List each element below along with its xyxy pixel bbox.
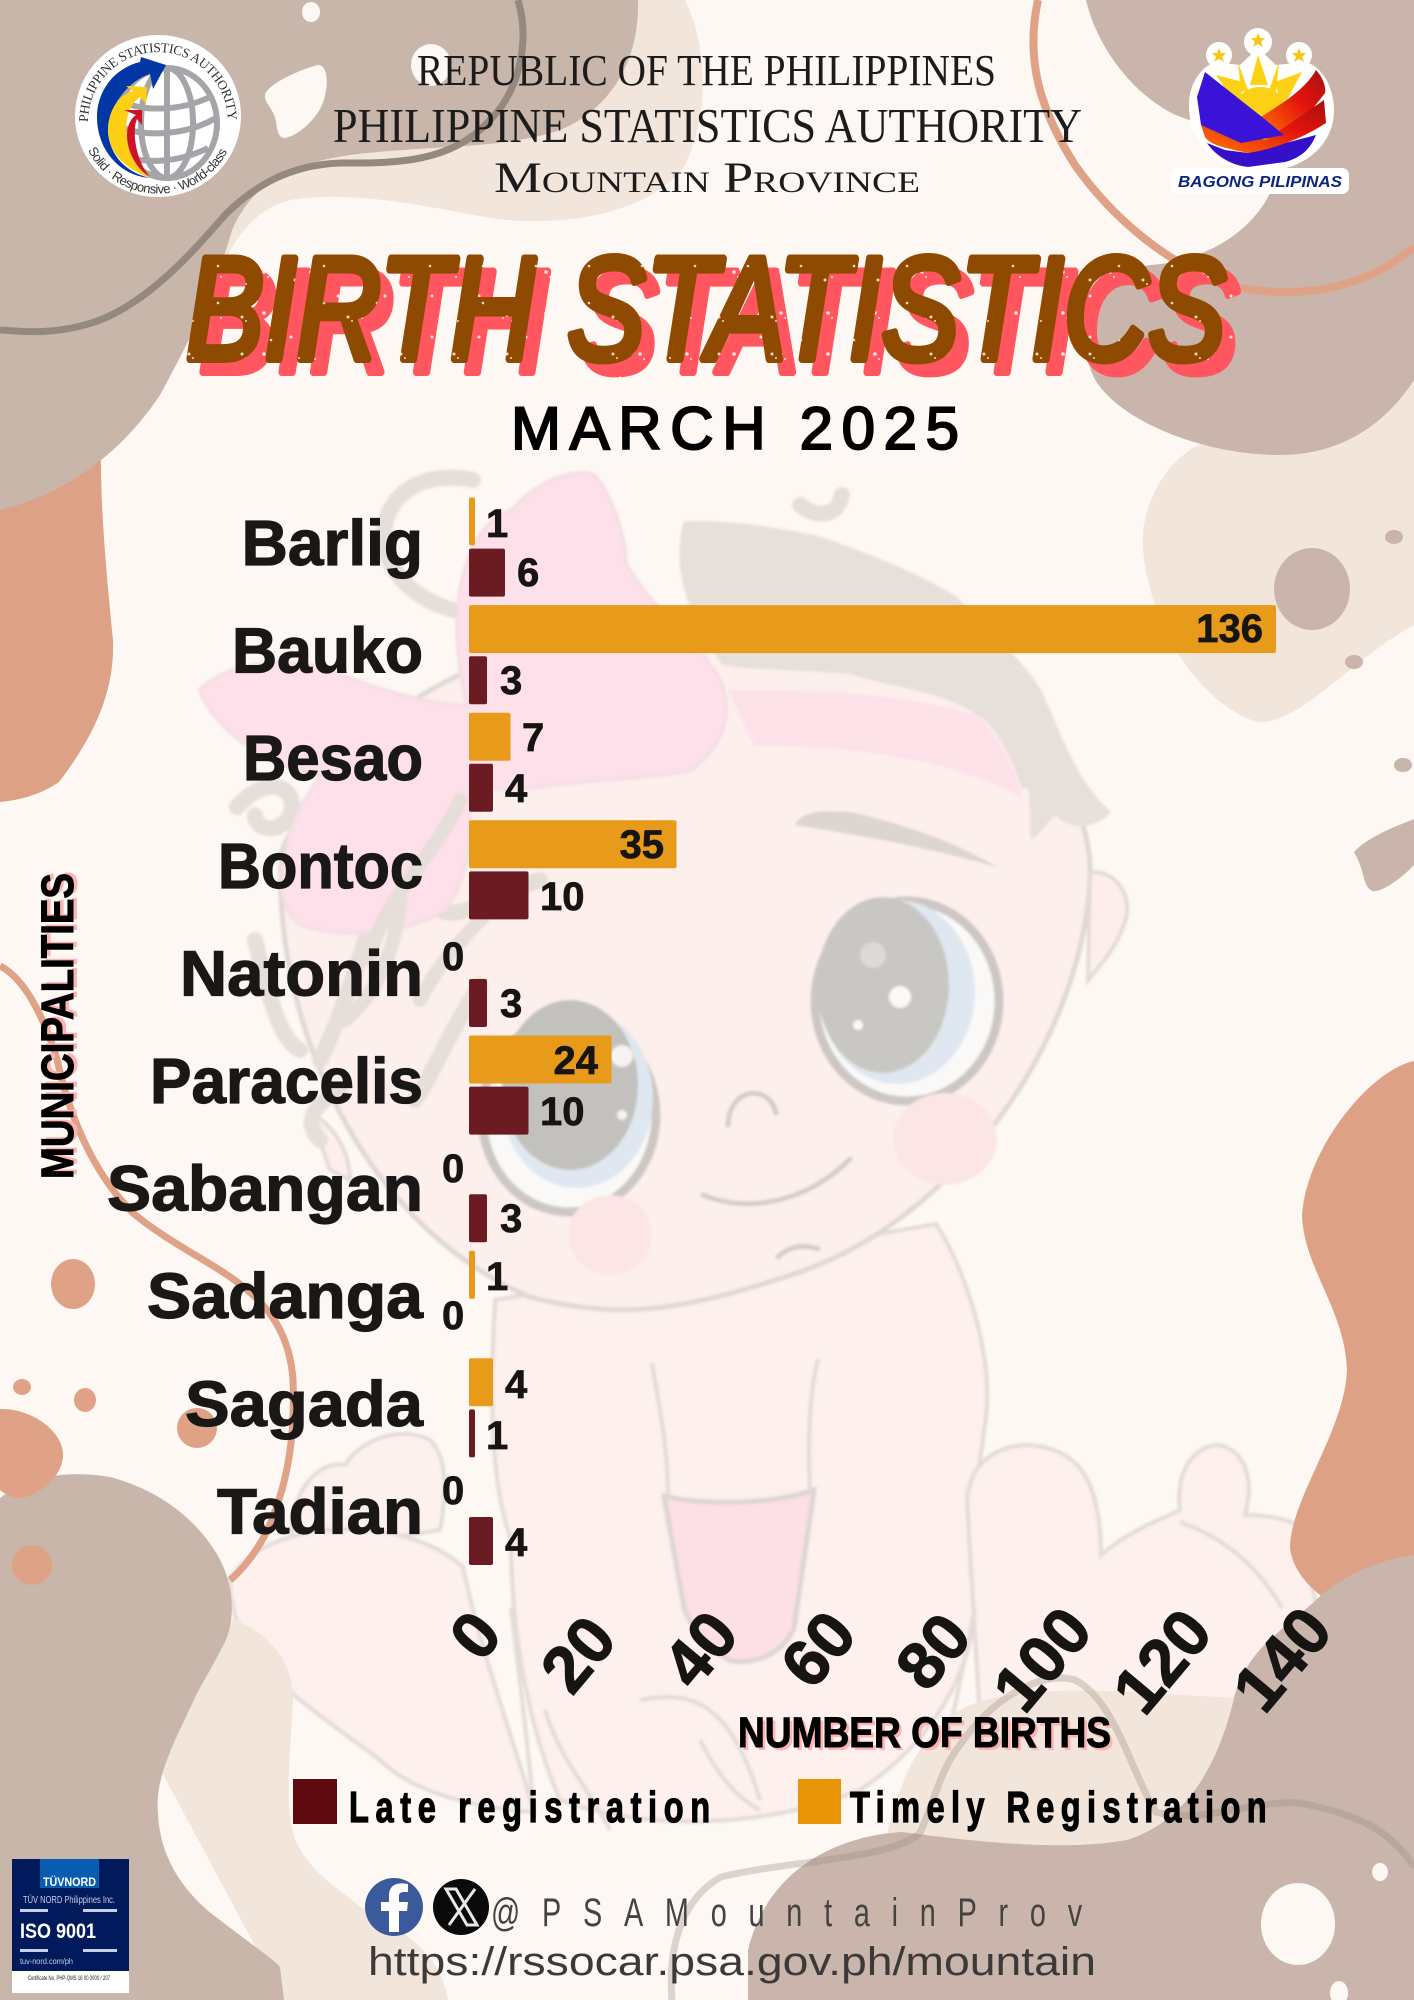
municipality labels: Sabangan xyxy=(107,1153,423,1225)
y axis title: MUNICIPALITIES xyxy=(32,873,83,1179)
diaper xyxy=(664,1490,814,1662)
eyebrow xyxy=(795,811,999,868)
data value labels: 0 xyxy=(442,1147,464,1191)
left eye xyxy=(482,1000,656,1212)
data value labels xyxy=(442,502,1263,1565)
municipality labels: Bauko xyxy=(232,615,423,687)
bands xyxy=(1259,70,1325,140)
data value labels: 1 xyxy=(486,1255,508,1299)
data value labels: 1 xyxy=(486,1414,508,1458)
ISO 9001 badge: tuv-nord.com/ph xyxy=(20,1957,73,1966)
legend swatch: late xyxy=(293,1779,337,1824)
baby left toes xyxy=(292,1434,444,1553)
data value labels: 4 xyxy=(505,1521,528,1565)
cheeks xyxy=(568,1093,997,1275)
municipality labels: Paracelis xyxy=(150,1045,423,1117)
right taupe dots xyxy=(1274,530,1414,891)
stars xyxy=(1212,33,1306,62)
municipality labels: Barlig xyxy=(242,507,423,579)
background shape: top-right taupe xyxy=(1086,0,1414,455)
late registration bars xyxy=(469,549,528,1565)
data value labels: 24 xyxy=(554,1039,599,1083)
data value labels: 6 xyxy=(517,551,539,595)
data value labels: 3 xyxy=(500,659,522,703)
y axis title: MUNICIPALITIES xyxy=(36,871,87,1177)
x axis ticks: 80 xyxy=(881,1599,985,1703)
data value labels: 35 xyxy=(620,823,664,867)
data value labels: 10 xyxy=(540,875,584,919)
background shape: right peach xyxy=(1290,1061,1414,1640)
x axis title: NUMBER OF BIRTHS xyxy=(738,1709,1111,1757)
legend xyxy=(293,1779,1267,1832)
hair xyxy=(679,521,1111,838)
nose and mouth xyxy=(703,1093,850,1257)
data value labels: 3 xyxy=(500,1197,522,1241)
hair strands over bow xyxy=(345,800,500,1020)
ISO 9001 badge: TÜVNORD xyxy=(43,1874,96,1889)
globe xyxy=(117,68,217,178)
x axis ticks: 20 xyxy=(526,1602,630,1706)
pink headband xyxy=(728,690,1022,797)
x axis ticks: 100 xyxy=(978,1593,1106,1725)
municipality labels: Sadanga xyxy=(147,1260,423,1332)
header: republic line: REPUBLIC OF THE PHILIPPINES xyxy=(417,46,996,95)
background shape: bottom-right taupe xyxy=(748,1555,1414,2000)
background shape: top-left taupe xyxy=(0,0,638,510)
baby body xyxy=(492,1224,987,1821)
top-right peach curve xyxy=(1033,0,1414,292)
icon: X xyxy=(433,1879,489,1935)
top-left white blobs xyxy=(265,2,451,138)
municipality labels: Besao xyxy=(243,722,423,794)
ISO 9001 badge: TÜV NORD Philippines Inc. xyxy=(23,1894,115,1906)
pink bow xyxy=(199,472,727,933)
x axis ticks: 40 xyxy=(648,1597,752,1701)
municipality labels xyxy=(107,507,423,1547)
PSA arrows xyxy=(97,57,166,178)
subtitle: MARCH 2025 xyxy=(511,395,959,462)
PSA motto: Solid · Responsive · World-class xyxy=(89,147,226,194)
website url: https://rssocar.psa.gov.ph/mountain xyxy=(368,1940,1096,1984)
x axis ticks: 60 xyxy=(766,1597,870,1701)
ISO 9001 badge: ISO 9001 xyxy=(20,1920,96,1943)
label plate xyxy=(1171,168,1349,194)
ISO 9001 badge xyxy=(12,1859,129,1993)
data value labels: 7 xyxy=(522,716,544,760)
baby head xyxy=(281,622,1090,1310)
bottom-right decorative curve xyxy=(671,1678,1414,2000)
Bagong Pilipinas logo xyxy=(1171,28,1349,194)
x axis ticks: 0 xyxy=(435,1597,515,1673)
baby arm creases and toes xyxy=(511,1359,1282,1830)
municipality labels: Sagada xyxy=(185,1368,423,1440)
PSA logo xyxy=(75,35,241,197)
hair curls xyxy=(237,478,842,1140)
legend label: late: Late registration xyxy=(349,1783,710,1832)
legend swatch: timely xyxy=(798,1779,841,1824)
data value labels: 0 xyxy=(442,1469,464,1513)
data value labels: 1 xyxy=(486,502,508,546)
x axis ticks: 120 xyxy=(1098,1595,1226,1727)
social handle: @PSAMountainProv xyxy=(491,1890,1083,1935)
background shape: bottom-left beige xyxy=(150,1619,448,2000)
background shape: left peach xyxy=(0,440,113,802)
sun xyxy=(1216,55,1302,145)
data value labels: 0 xyxy=(442,1294,464,1338)
background shape: bottom-left taupe xyxy=(0,1474,284,2000)
header: province line: Mountain Province xyxy=(494,155,920,202)
left peach curve xyxy=(0,966,293,1580)
PSA arc text: PHILIPPINE STATISTICS AUTHORITY xyxy=(79,43,237,122)
municipality labels: Natonin xyxy=(180,937,423,1009)
data value labels: 3 xyxy=(500,982,522,1026)
timely registration bars xyxy=(469,498,1276,1406)
data value labels: 4 xyxy=(505,767,528,811)
left peach blobs xyxy=(0,1259,217,1585)
municipality labels: Bontoc xyxy=(218,830,423,902)
x axis title: NUMBER OF BIRTHS xyxy=(741,1712,1114,1760)
faded baby illustration xyxy=(199,472,1320,1830)
x axis ticks xyxy=(435,1593,1346,1727)
municipality labels: Tadian xyxy=(217,1475,423,1547)
ISO 9001 badge: Certificate No. PHP-QMS 18 00 0000 / 207 xyxy=(28,1976,110,1982)
icon: Facebook xyxy=(365,1878,423,1936)
header: agency line: PHILIPPINE STATISTICS AUTHORITY xyxy=(333,98,1082,153)
data value labels: 10 xyxy=(540,1090,584,1134)
bottom-right white blobs xyxy=(1261,1863,1388,2000)
background shape: right beige xyxy=(1143,380,1414,722)
baby right leg and foot xyxy=(967,1445,1320,1800)
data value labels: 0 xyxy=(442,935,464,979)
data value labels: 136 xyxy=(1196,607,1263,651)
baby ears xyxy=(310,872,1127,1180)
right eye xyxy=(815,897,999,1101)
baby left leg and foot xyxy=(230,1529,534,1812)
background shape: bottom-right beige xyxy=(888,1691,1243,1860)
bar chart xyxy=(107,498,1346,1727)
background shape: top-left beige xyxy=(200,0,703,290)
legend label: timely: Timely Registration xyxy=(850,1783,1267,1832)
x axis ticks: 140 xyxy=(1218,1593,1346,1725)
top-left grey curve xyxy=(0,0,523,332)
label text: BAGONG PILIPINAS xyxy=(1178,174,1343,191)
data value labels: 4 xyxy=(505,1363,528,1407)
